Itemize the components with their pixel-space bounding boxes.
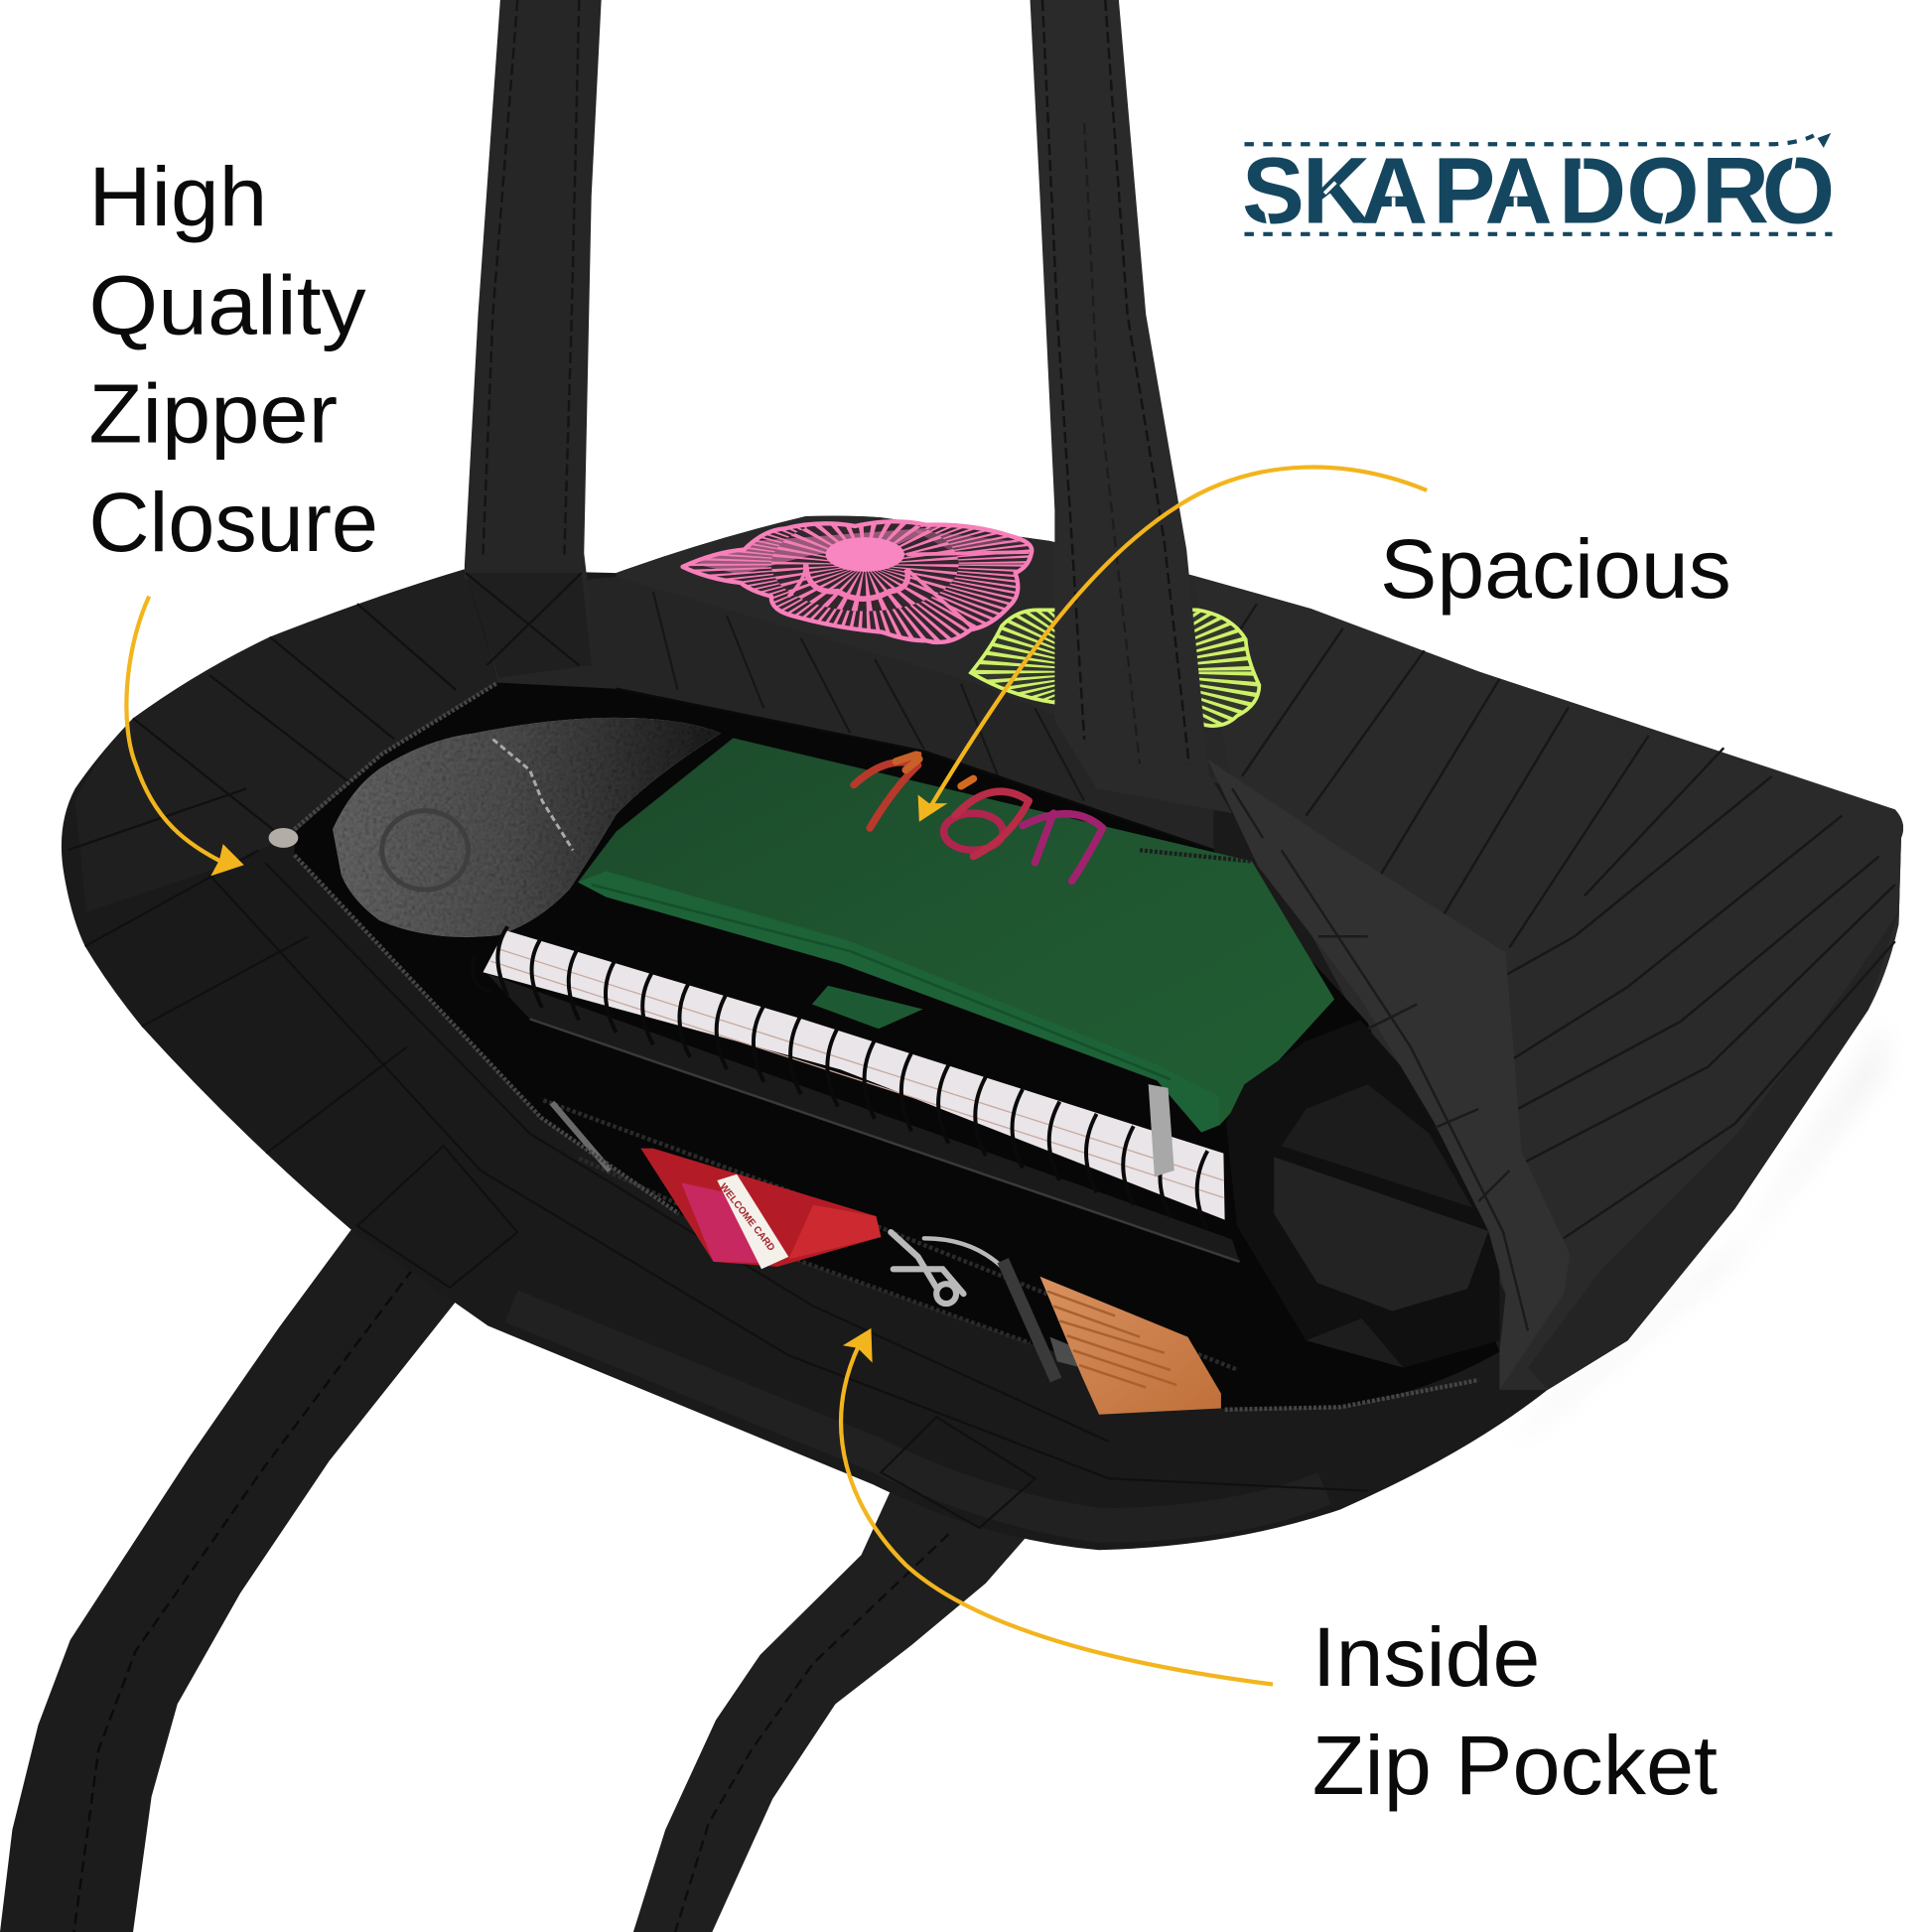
spiral rings: [473, 926, 1207, 1230]
panel: back of bag with flowers: [616, 516, 1229, 784]
text: inside zip pocket: [1312, 1610, 1718, 1812]
arrow: zipper callout: [126, 597, 244, 876]
back rim band: [481, 577, 1213, 850]
socks: [333, 718, 721, 937]
fabric fold on right: [1207, 759, 1570, 1390]
strap: upper left: [465, 0, 602, 678]
text: inside zip pocket: Inside: [1312, 1610, 1540, 1704]
text: inside zip pocket: Zip Pocket: [1312, 1719, 1718, 1812]
bag interior: [295, 683, 1499, 1410]
bag body silhouette: [62, 516, 1903, 1550]
inside pocket: zipper: [543, 1100, 1238, 1370]
zipper pull: [269, 828, 298, 848]
card text: WELCOME CARD: [717, 1181, 776, 1253]
text: spacious: Spacious: [1380, 522, 1731, 616]
text: high quality zipper closure: [88, 150, 378, 569]
pouch zipper pull: [1149, 1084, 1174, 1176]
arrow: zip pocket callout: [841, 1328, 1273, 1685]
text: high quality zipper closure: Zipper: [88, 367, 338, 461]
text: high quality zipper closure: Closure: [88, 476, 378, 569]
cards: [640, 1149, 881, 1269]
green pouch: [578, 738, 1334, 1176]
strap: lower right: [633, 1484, 1029, 1932]
arrow: spacious callout: [918, 467, 1427, 822]
text: high quality zipper closure: High: [88, 150, 267, 243]
strap: upper right: [1031, 0, 1232, 813]
upper left rim: [75, 569, 497, 911]
panel: left and front rim stitching: [68, 604, 1368, 1528]
panel: quilted side of bag: [1192, 576, 1903, 1390]
lower rim highlight: [511, 1307, 1324, 1525]
keys and keyring: [891, 1232, 1089, 1380]
text: high quality zipper closure: Quality: [88, 258, 366, 351]
green patch under pouch: [812, 986, 923, 1029]
embroidery: lime flower: [968, 608, 1261, 728]
wooden comb: [1039, 1277, 1221, 1415]
notebook: [473, 926, 1240, 1262]
embroidery: pink flower: [689, 523, 1031, 640]
black flask lid: [1226, 1021, 1499, 1368]
logo: Skapadoro: SKAPADORO: [1242, 139, 1835, 243]
strap: lower left: [0, 1230, 462, 1932]
main zipper: [295, 683, 1478, 1410]
embroidery: red and magenta lettering: [854, 755, 1103, 881]
